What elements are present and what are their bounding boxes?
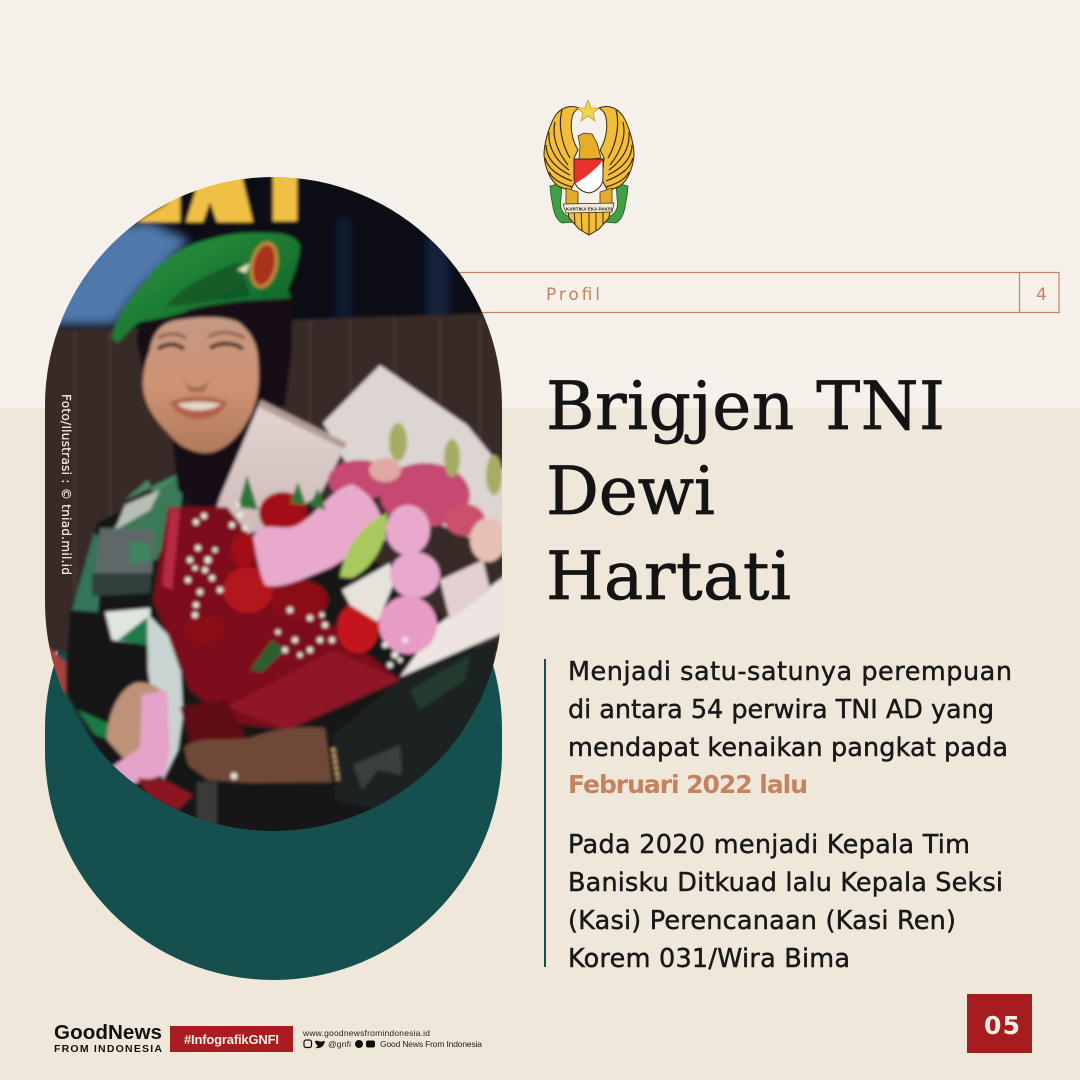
flowers: green lily bud xyxy=(340,513,387,578)
hijab xyxy=(137,296,292,515)
photo background: yellow sign letters xyxy=(136,177,301,226)
text block: first paragraph: mendapat kenaikan pangkat pada xyxy=(568,733,1008,763)
beret badge xyxy=(248,241,280,289)
red wrap under hands xyxy=(178,700,248,744)
paper tag xyxy=(147,613,183,780)
title xyxy=(546,368,945,615)
photo: officer holding bouquet xyxy=(45,177,502,831)
text block: first paragraph: di antara 54 perwira TNI AD yang xyxy=(568,695,994,725)
grey strap xyxy=(195,780,218,824)
red wrap bottom xyxy=(137,778,193,810)
footer contact info: Good News From Indonesia xyxy=(380,1039,482,1049)
smile xyxy=(170,397,227,419)
hand: pink cloth and left hand xyxy=(107,682,168,760)
bouquet paper wrappers xyxy=(323,365,520,560)
text block: first paragraph xyxy=(568,657,1012,799)
icon: facebook xyxy=(355,1040,363,1048)
text block: second paragraph: Banisku Ditkuad lalu Kepala Seksi xyxy=(568,868,1003,898)
photo credit: Foto/Ilustrasi : © tniad.mil.id xyxy=(59,394,73,575)
text block: first paragraph: Februari 2022 lalu xyxy=(568,770,808,799)
title: Brigjen TNI xyxy=(546,368,945,445)
icon: army emblem: KARTIKA EKA PAKSI xyxy=(566,206,612,212)
emblem tail xyxy=(567,205,611,235)
flowers: baby's breath xyxy=(185,502,408,668)
section header bar: Profil 4 xyxy=(440,272,1059,313)
uniform: camo patches xyxy=(125,472,180,562)
emblem right wing xyxy=(599,107,634,191)
emblem shield xyxy=(574,159,603,193)
emblem left wing xyxy=(544,107,579,191)
hashtag badge xyxy=(170,1026,293,1052)
uniform: dark torso base xyxy=(64,493,477,831)
icon: youtube xyxy=(366,1040,375,1048)
footer contact info xyxy=(302,1028,482,1049)
flowers: pink lilies xyxy=(253,484,440,654)
photo background: dark wall xyxy=(57,177,484,333)
page number badge: 05 xyxy=(984,1011,1020,1040)
title: Hartati xyxy=(546,538,791,615)
footer contact info: www.goodnewsfromindonesia.id xyxy=(302,1028,430,1038)
hand: right hand with ring xyxy=(184,727,332,783)
section header bar: Profil 4: 4 xyxy=(1036,285,1047,305)
bouquet red wrapper xyxy=(153,507,400,730)
footer contact info: @gnfi xyxy=(328,1039,351,1049)
icon: army emblem xyxy=(544,100,634,235)
text block: second paragraph: Korem 031/Wira Bima xyxy=(568,944,850,974)
icon: twitter xyxy=(315,1041,325,1048)
text block: second paragraph: (Kasi) Perencanaan (Kasi Ren) xyxy=(568,906,956,936)
flowers: pink stock xyxy=(328,460,485,536)
logo: GoodNews From Indonesia: FROM INDONESIA xyxy=(54,1043,162,1055)
bouquet white paper right xyxy=(398,574,502,680)
emblem green laurels xyxy=(550,183,628,223)
logo: GoodNews From Indonesia: GoodNews xyxy=(54,1021,162,1044)
section header bar: Profil 4: Profil xyxy=(546,285,600,305)
icon: instagram xyxy=(304,1040,312,1048)
page number badge xyxy=(967,994,1032,1053)
face xyxy=(143,317,259,453)
emblem eagle xyxy=(578,133,601,160)
uniform: right sleeve xyxy=(333,640,497,810)
red floor strip xyxy=(49,644,70,697)
text block: second paragraph xyxy=(568,830,1003,974)
emblem motto ribbon xyxy=(563,203,614,213)
flowers: leaves xyxy=(238,475,326,510)
logo: GoodNews From Indonesia xyxy=(54,1021,162,1055)
text block: first paragraph: Menjadi satu-satunya perempuan xyxy=(568,657,1012,687)
emblem star xyxy=(577,100,599,121)
title: Dewi xyxy=(546,453,715,530)
teal capsule behind photo xyxy=(45,500,502,980)
flowers: white lily xyxy=(342,563,393,622)
background: cream upper band xyxy=(0,0,1080,408)
photo background: wood wall xyxy=(20,312,530,652)
beret xyxy=(112,233,300,343)
background: beige lower band xyxy=(0,408,1080,1080)
emblem claws xyxy=(566,188,612,204)
text block: second paragraph: Pada 2020 menjadi Kepala Tim xyxy=(568,830,970,860)
vertical accent line xyxy=(544,659,546,967)
hashtag badge: #InfografikGNFI xyxy=(184,1032,279,1047)
flowers: red roses xyxy=(185,492,379,653)
